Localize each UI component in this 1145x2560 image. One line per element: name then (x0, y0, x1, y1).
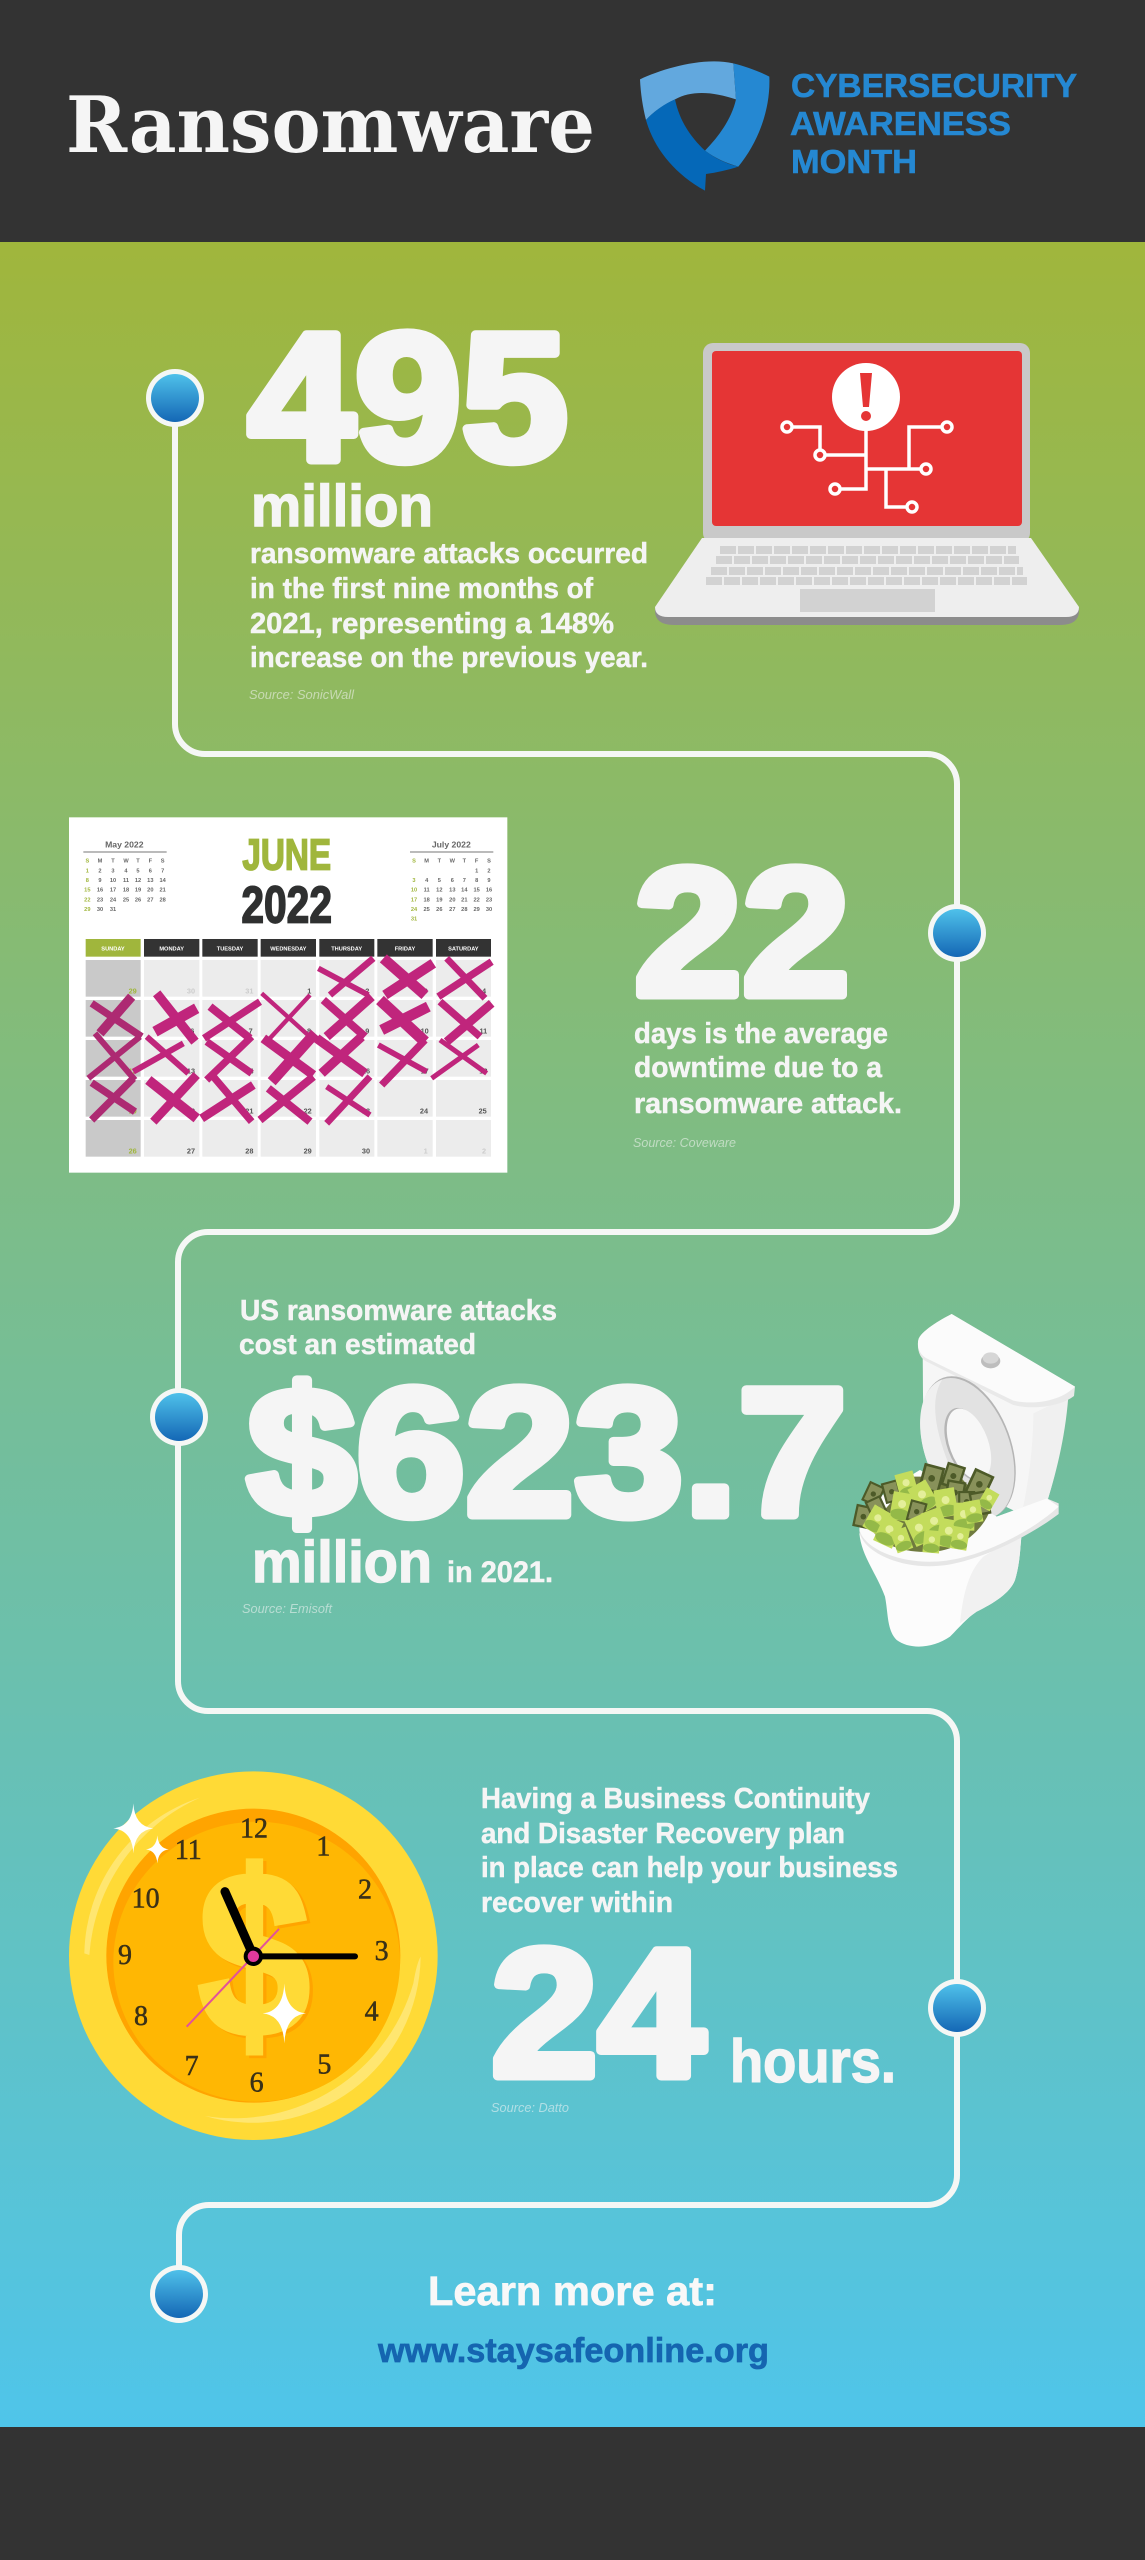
mini calendar May: 5 (136, 868, 140, 874)
mini calendar May: 30 (97, 907, 103, 913)
day cells: 2 (482, 1147, 486, 1156)
dollar sign: $ (199, 1825, 309, 2084)
mini calendar May: 15 (84, 888, 90, 894)
icon: shield logo (640, 61, 769, 191)
mini calendar July: 30 (486, 907, 492, 913)
panel: 22 days stat (633, 830, 902, 1150)
mini calendar May: 17 (110, 888, 116, 894)
logo wordmark: CYBERSECURITY (791, 67, 1077, 104)
money bills (852, 1462, 999, 1554)
panel: 495 million stat (248, 295, 648, 702)
mini calendar May: T (111, 858, 115, 864)
day cells (86, 960, 491, 1157)
day cells: 11 (479, 1027, 487, 1036)
timeline marker 3 (150, 1388, 208, 1446)
mini calendar May: 20 (147, 888, 153, 894)
intro text: US ransomware attacks (240, 1295, 557, 1327)
mini calendar May: 11 (123, 878, 129, 884)
heading JUNE 2022: 2022 (241, 877, 332, 935)
big number 22: 22 (634, 830, 850, 1034)
weekday header row: SUNDAY (101, 946, 125, 952)
description: ransomware attack. (634, 1088, 902, 1120)
intro text (239, 1295, 557, 1361)
day cells: 25 (479, 1107, 487, 1116)
heading JUNE 2022 (241, 831, 332, 935)
mini calendar May: 6 (149, 868, 152, 874)
mini calendar July: 21 (461, 897, 467, 903)
mini calendar July: T (463, 858, 467, 864)
timeline marker 2 (928, 904, 986, 962)
highlights (84, 1798, 421, 2123)
day cells: 19 (129, 1107, 137, 1116)
day cells: 31 (245, 987, 253, 996)
description (250, 538, 648, 674)
mini calendar May: 19 (135, 888, 141, 894)
mini calendar July: 24 (411, 907, 418, 913)
mini calendar May: 23 (97, 897, 103, 903)
clock numerals: 11 (175, 1835, 202, 1866)
day cells: 16 (362, 1067, 370, 1076)
day cells: 27 (187, 1147, 195, 1156)
day cells: 7 (249, 1027, 253, 1036)
day cells: 28 (245, 1147, 253, 1156)
weekday header row: THURSDAY (331, 946, 362, 952)
day cells: 30 (187, 987, 195, 996)
mini calendar May: 26 (135, 897, 141, 903)
day cells: 4 (482, 987, 487, 996)
mini calendar May: 29 (84, 907, 90, 913)
description: days is the average (634, 1018, 888, 1050)
description: in the first nine months of (250, 573, 593, 605)
clock numerals: 8 (134, 2001, 148, 2032)
website url: www.staysafeonline.org (377, 2332, 769, 2370)
day cells: 14 (245, 1067, 254, 1076)
mini calendar May: 24 (110, 897, 117, 903)
source: Source: Coveware (633, 1135, 736, 1150)
day cells: 21 (245, 1107, 253, 1116)
header bar (0, 0, 1145, 242)
day cells: 30 (362, 1147, 370, 1156)
mini calendar July: 20 (449, 897, 455, 903)
mini calendar May: 2 (98, 868, 102, 874)
day cells: 23 (362, 1107, 370, 1116)
mini calendar May: W (123, 858, 129, 864)
in 2021: in 2021. (447, 1556, 553, 1589)
day cells: 20 (187, 1107, 195, 1116)
day cells: 18 (479, 1067, 487, 1076)
mini calendar July: 25 (424, 907, 430, 913)
dollar sign: $ (202, 1828, 312, 2087)
day cells: 13 (187, 1067, 195, 1076)
clock numerals: 7 (185, 2051, 199, 2082)
day cells: 26 (129, 1147, 137, 1156)
mini calendar July: 28 (461, 907, 467, 913)
mini calendar July: S (487, 858, 491, 864)
mini calendar July: 29 (474, 907, 480, 913)
million label: million (251, 474, 433, 539)
weekday header row: MONDAY (159, 946, 184, 952)
day cells: 24 (420, 1107, 429, 1116)
call to action (377, 2268, 769, 2370)
day cells: 5 (131, 1027, 135, 1036)
clock numerals: 5 (317, 2049, 331, 2080)
source: Source: SonicWall (249, 687, 355, 702)
weekday header row: SATURDAY (448, 946, 479, 952)
day cells: 10 (421, 1027, 429, 1036)
day cells: 1 (307, 987, 311, 996)
source: Source: Datto (491, 2100, 569, 2115)
timeline connector line (175, 398, 957, 2294)
weekday header row (86, 939, 491, 957)
mini calendar May: 12 (135, 878, 141, 884)
mini calendar July: 15 (474, 888, 480, 894)
mini calendar July: 13 (449, 888, 455, 894)
weekday header row: WEDNESDAY (270, 946, 307, 952)
day cells: 29 (129, 987, 137, 996)
clock numerals (118, 1813, 389, 2099)
day cells: 29 (304, 1147, 312, 1156)
clock numerals: 3 (375, 1936, 389, 1967)
logo wordmark (790, 67, 1077, 180)
mini calendar May: 28 (160, 897, 166, 903)
mini calendar May (83, 839, 167, 913)
mini calendar May: 3 (111, 868, 115, 874)
mini calendar July: 9 (487, 878, 491, 884)
clock numerals: 10 (132, 1883, 160, 1914)
mini calendar May: 16 (97, 888, 103, 894)
mini calendar July: 31 (411, 917, 417, 923)
mini calendar May: 14 (160, 878, 167, 884)
clock numerals: 9 (118, 1940, 132, 1971)
description: 2021, representing a 148% (250, 608, 614, 640)
logo wordmark: MONTH (791, 143, 917, 180)
mini calendar July: 26 (436, 907, 442, 913)
mini calendar May: 31 (110, 907, 116, 913)
description: Having a Business Continuity (481, 1783, 870, 1815)
calendar (69, 817, 507, 1173)
mini calendar July: 11 (424, 888, 430, 894)
mini calendar May: 8 (86, 878, 89, 884)
mini calendar May: 9 (98, 878, 102, 884)
clock numerals: 4 (365, 1997, 379, 2028)
mini calendar July: 23 (486, 897, 492, 903)
mini calendar July: W (450, 858, 456, 864)
mini calendar July: 4 (425, 878, 429, 884)
weekday header row: FRIDAY (395, 946, 415, 952)
clock numerals: 12 (240, 1813, 268, 1844)
day cells: 12 (129, 1067, 137, 1076)
mini calendar May: May 2022 (105, 839, 144, 849)
mini calendar July: 7 (463, 878, 466, 884)
logo wordmark: AWARENESS (790, 105, 1011, 142)
mini calendar July: 2 (487, 868, 491, 874)
timeline marker 5 (150, 2265, 208, 2323)
mini calendar July: 27 (449, 907, 455, 913)
icon: toilet full of money (852, 1314, 1075, 1647)
day cells: 22 (304, 1107, 312, 1116)
timeline marker 4 (928, 1979, 986, 2037)
big number 24: 24 (491, 1911, 705, 2115)
hours label: hours. (730, 2028, 896, 2095)
mini calendar May: 21 (160, 888, 166, 894)
mini calendar May: 22 (84, 897, 90, 903)
mini calendar July: 12 (436, 888, 442, 894)
title: Ransomware (66, 80, 595, 171)
day cells: 8 (307, 1027, 311, 1036)
mini calendar May: 4 (124, 868, 128, 874)
day cells: 2 (365, 987, 369, 996)
big number 495: 495 (248, 295, 568, 499)
mini calendar July: 14 (461, 888, 468, 894)
mini calendar May: S (161, 858, 165, 864)
mini calendar July: 19 (436, 897, 442, 903)
learn more heading: Learn more at: (428, 2268, 717, 2314)
mini calendar July: 8 (475, 878, 478, 884)
mini calendar July: 10 (411, 888, 417, 894)
icon: gold coin clock (69, 1771, 438, 2140)
mini calendar July: 5 (438, 878, 441, 884)
clock numerals: 6 (250, 2068, 264, 2099)
alert circuit (782, 422, 952, 512)
sparkles (113, 1803, 306, 2043)
mini calendar May: 18 (123, 888, 129, 894)
clock numerals: 2 (358, 1874, 372, 1905)
mini calendar July: S (412, 858, 416, 864)
day cells: 6 (190, 1027, 194, 1036)
mini calendar May: S (85, 858, 89, 864)
mini calendar July: 18 (424, 897, 430, 903)
mini calendar July: 6 (451, 878, 454, 884)
big number 623.7: $623.7 (247, 1350, 847, 1554)
day cells: 1 (424, 1147, 428, 1156)
panel: 24 hours stat (481, 1783, 898, 2115)
day cells: 3 (424, 987, 428, 996)
day cells: 15 (304, 1067, 312, 1076)
mini calendar May: M (98, 858, 103, 864)
day cells: 9 (365, 1027, 369, 1036)
mini calendar July: 16 (486, 888, 492, 894)
description: recover within (481, 1887, 673, 1919)
description: ransomware attacks occurred (250, 538, 648, 570)
source: Source: Emisoft (242, 1601, 333, 1616)
mini calendar July: T (438, 858, 442, 864)
panel: 623.7 million stat (239, 1295, 847, 1616)
million label: million (252, 1530, 432, 1595)
mini calendar May: 10 (110, 878, 116, 884)
mini calendar July: July 2022 (432, 839, 471, 849)
description: and Disaster Recovery plan (481, 1818, 845, 1850)
mini calendar May: T (136, 858, 140, 864)
description: increase on the previous year. (250, 642, 648, 674)
description: downtime due to a (634, 1052, 883, 1084)
mini calendar July: 1 (475, 868, 478, 874)
heading JUNE 2022: JUNE (242, 831, 331, 879)
weekday header row: TUESDAY (217, 946, 243, 952)
mini calendar July (410, 839, 493, 923)
mini calendar July: 22 (474, 897, 480, 903)
mini calendar May: 7 (161, 868, 164, 874)
mini calendar July: 17 (411, 897, 417, 903)
icon: laptop with alert (655, 343, 1079, 625)
mini calendar May: 13 (147, 878, 153, 884)
description: in place can help your business (481, 1852, 898, 1884)
mini calendar May: 25 (123, 897, 129, 903)
crossed off days (88, 958, 492, 1123)
mini calendar May: 27 (147, 897, 153, 903)
mini calendar July: F (475, 858, 479, 864)
clock hands (187, 1892, 355, 2027)
mini calendar July: M (424, 858, 429, 864)
clock numerals: 1 (316, 1832, 330, 1863)
mini calendar May: F (149, 858, 153, 864)
footer bar (0, 2427, 1145, 2560)
description (481, 1783, 898, 1919)
mini calendar May: 1 (86, 868, 89, 874)
description (634, 1018, 902, 1120)
timeline marker 1 (146, 369, 204, 427)
intro text: cost an estimated (239, 1329, 476, 1361)
mini calendar July: 3 (412, 878, 416, 884)
day cells: 17 (421, 1067, 429, 1076)
